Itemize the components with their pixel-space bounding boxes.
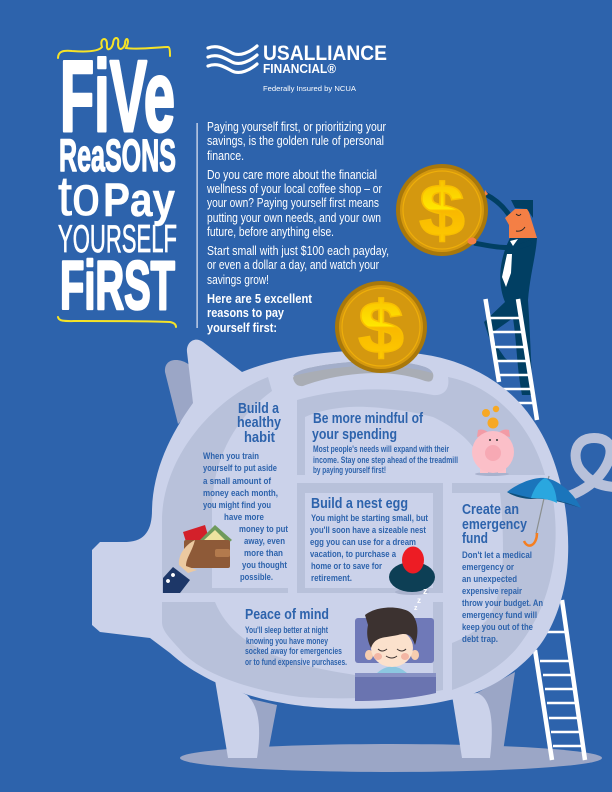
man in suit bbox=[474, 190, 537, 395]
piggy bank body bbox=[92, 340, 568, 709]
man smile and eye bbox=[516, 214, 525, 231]
text: Build a nest egg bbox=[310, 513, 429, 584]
cheeks bbox=[374, 653, 409, 660]
text: Create an emergency fund: Don't let a medical bbox=[462, 550, 532, 561]
icon: pink piggy bank bbox=[472, 406, 514, 476]
hair bbox=[365, 608, 417, 648]
text: Build a nest egg: home or to save for bbox=[311, 561, 382, 572]
text: Peace of mind: socked away for emergencies bbox=[245, 646, 342, 656]
heading: Be more mindful of your spending: Be more mindful of bbox=[313, 411, 423, 427]
icon: umbrella bbox=[507, 476, 581, 546]
heading: Be more mindful of your spending: your spending bbox=[312, 427, 397, 443]
compartment 4 frame bbox=[452, 483, 556, 690]
text: Be more mindful: by paying yourself first! bbox=[313, 465, 386, 475]
heading: Build a healthy habit: habit bbox=[244, 430, 275, 446]
text: Be more mindful: Most people's needs will expand with their bbox=[313, 444, 449, 454]
text: Create an emergency fund: an unexpected bbox=[462, 574, 517, 585]
title word: to: to bbox=[58, 164, 100, 227]
logo name: USALLIANCE bbox=[263, 41, 387, 65]
intro paragraph 3: or even a dollar a day, and watch your bbox=[207, 258, 379, 272]
intro bold lead-in: yourself first: bbox=[207, 321, 277, 335]
pig tail bbox=[566, 438, 612, 497]
ears bbox=[365, 650, 419, 660]
lower ladder bbox=[535, 600, 585, 760]
intro paragraph 1: savings, is the golden rule of personal bbox=[207, 134, 384, 148]
intro paragraph 3: Start small with just $100 each payday, bbox=[207, 244, 389, 258]
face bbox=[371, 629, 413, 667]
compartment 2 frame bbox=[297, 377, 545, 475]
text: Build a healthy habit: yourself to put aside bbox=[203, 463, 277, 474]
text: Create an emergency fund: throw your budget. An bbox=[462, 598, 543, 609]
piggy ears bbox=[477, 430, 510, 437]
text: Build a healthy habit: possible. bbox=[240, 572, 273, 583]
piggy shadow bbox=[475, 472, 509, 476]
title word: Yourself: YOURSELF bbox=[58, 218, 177, 261]
text: Build a healthy habit: have more bbox=[224, 512, 264, 523]
left leg bbox=[247, 698, 277, 758]
compartment 5 frame bbox=[162, 602, 443, 698]
text: Build a nest egg: You might be starting small, but bbox=[311, 513, 429, 524]
credit cards bbox=[183, 525, 210, 545]
heading: Peace of mind: Peace of mind bbox=[245, 607, 329, 623]
man upper arm bbox=[485, 194, 511, 218]
nest shadow bbox=[395, 589, 429, 595]
text: Build a healthy habit: you might find you bbox=[203, 500, 271, 511]
intro paragraph 3: savings grow! bbox=[207, 273, 269, 287]
blanket edge bbox=[355, 673, 436, 677]
sleep zzz marks: z bbox=[423, 586, 428, 596]
coin: on pig slot: $ bbox=[358, 286, 404, 369]
text: Build a nest egg: you'll soon have a sizeable nest bbox=[310, 525, 427, 536]
heading: Build a healthy habit: healthy bbox=[237, 415, 281, 431]
compartment 3 frame bbox=[297, 483, 443, 593]
heading: Build a nest egg: Build a nest egg bbox=[311, 496, 408, 512]
title: Five Reasons to Pay Yourself First bbox=[58, 38, 177, 327]
text: Create an emergency fund: emergency fund will bbox=[462, 610, 537, 621]
title word: Reasons: ReaSONS bbox=[59, 130, 176, 181]
heading: Create an emergency fund: Create an bbox=[462, 502, 519, 518]
sleeve bbox=[163, 567, 190, 593]
pig back ear bbox=[165, 360, 198, 424]
umbrella underside bbox=[507, 492, 581, 508]
heading: Build a healthy habit bbox=[237, 401, 281, 446]
piggy feet bbox=[480, 465, 506, 473]
text: Create an emergency fund: keep you out of the bbox=[462, 622, 533, 633]
umbrella center panel bbox=[531, 478, 557, 503]
logo: USAlliance Financial bbox=[208, 41, 387, 93]
text: Build a healthy habit: When you train bbox=[203, 451, 259, 462]
text: Build a healthy habit: away, even bbox=[244, 536, 285, 547]
man's hand on coin bbox=[468, 238, 476, 244]
intro paragraph 1 bbox=[207, 120, 386, 163]
man hands bbox=[484, 190, 488, 197]
icon: hand holding wallet bbox=[163, 525, 232, 593]
intro paragraph 1: Paying yourself first, or prioritizing your bbox=[207, 120, 386, 134]
closed eyes and mouth bbox=[378, 649, 406, 658]
wallet clasp bbox=[215, 549, 230, 557]
text: Create an emergency fund: emergency or bbox=[462, 562, 514, 573]
cuff buttons bbox=[166, 573, 175, 583]
coin: on pig slot bbox=[335, 281, 427, 373]
text: Create an emergency fund: expensive repair bbox=[462, 586, 522, 597]
cash bbox=[200, 525, 232, 545]
title word: Five: FiVe bbox=[60, 41, 175, 153]
intro paragraph 2: Do you care more about the financial bbox=[207, 168, 377, 182]
text: Build a healthy habit: a small amount of bbox=[203, 476, 272, 487]
intro bold lead-in: Here are 5 excellent bbox=[207, 292, 313, 306]
federally insured note: Federally Insured by NCUA bbox=[263, 84, 356, 93]
text: Build a healthy habit: money to put bbox=[239, 524, 289, 535]
text: Build a healthy habit bbox=[203, 451, 289, 583]
umbrella handle bbox=[524, 533, 537, 546]
pig interior compartments bbox=[162, 377, 556, 698]
man face bbox=[505, 209, 537, 238]
text: Peace of mind: You'll sleep better at night bbox=[245, 625, 328, 635]
intro paragraph 2: putting your own needs, and your own bbox=[207, 211, 381, 225]
icon: nest with red egg bbox=[389, 546, 435, 612]
logo subname: FINANCIAL® bbox=[263, 62, 337, 76]
umbrella shaft bbox=[536, 476, 549, 534]
sleep zzz marks bbox=[414, 586, 428, 612]
intro paragraph 1: finance. bbox=[207, 149, 244, 163]
heading: Create an emergency fund bbox=[462, 502, 527, 547]
umbrella canopy bbox=[507, 478, 581, 508]
right leg bbox=[477, 672, 515, 758]
compartment 1 frame bbox=[162, 377, 288, 593]
egg bbox=[402, 546, 424, 574]
wallet bbox=[184, 540, 230, 568]
text: Peace of mind: or to fund expensive purchases. bbox=[245, 657, 347, 667]
piggy body bbox=[472, 431, 514, 473]
text: Build a healthy habit: more than bbox=[244, 548, 283, 559]
text: Peace of mind: knowing you have money bbox=[246, 636, 328, 646]
intro paragraph 2: future, before anything else. bbox=[207, 225, 334, 239]
piggy snout bbox=[485, 445, 501, 461]
falling coins bbox=[482, 406, 499, 428]
intro vertical rule bbox=[196, 123, 198, 328]
intro paragraph 2: wellness of your local coffee shop – or bbox=[206, 182, 382, 196]
intro paragraph 2 bbox=[206, 168, 382, 239]
pajama shoulders bbox=[377, 666, 407, 673]
pillow bbox=[355, 618, 434, 663]
sleep zzz marks: z bbox=[414, 605, 418, 612]
intro paragraph 2: your own? Paying yourself first means bbox=[207, 196, 379, 210]
heading: Be more mindful of your spending bbox=[312, 411, 423, 443]
coin: held by man: $ bbox=[419, 169, 465, 252]
man collar and tie bbox=[502, 239, 518, 287]
pig legs bbox=[215, 672, 515, 758]
title word: Pay: Pay bbox=[103, 173, 175, 226]
text: Be more mindful: income. Stay one step ahead of the treadmill bbox=[313, 455, 458, 465]
man lower arm bbox=[474, 242, 531, 248]
text: Build a nest egg: vacation, to purchase a bbox=[310, 549, 397, 560]
man body and legs bbox=[484, 238, 537, 395]
hand bbox=[179, 540, 197, 573]
piggy eyes bbox=[489, 439, 498, 441]
heading: Build a healthy habit: Build a bbox=[238, 401, 280, 417]
coin slot bbox=[293, 361, 433, 386]
text: Be more mindful bbox=[313, 444, 458, 475]
title bottom flourish bbox=[58, 317, 176, 327]
nest bbox=[389, 562, 435, 592]
text: Create an emergency fund bbox=[462, 550, 543, 645]
intro bold lead-in: reasons to pay bbox=[207, 306, 284, 320]
icon: sleeping boy in bed bbox=[355, 608, 436, 701]
ground shadow ellipse bbox=[180, 744, 602, 772]
heading: Create an emergency fund: fund bbox=[462, 531, 488, 547]
intro text block bbox=[196, 120, 389, 335]
intro paragraph 3 bbox=[207, 244, 389, 287]
bed bbox=[355, 673, 436, 701]
text: Peace of mind bbox=[245, 625, 347, 667]
intro bold lead-in bbox=[207, 292, 313, 335]
sleep zzz marks: z bbox=[417, 596, 421, 605]
upper ladder bbox=[486, 299, 537, 420]
text: Build a nest egg: egg you can use for a dream bbox=[310, 537, 416, 548]
text: Build a healthy habit: you thought bbox=[242, 560, 288, 571]
text: Build a nest egg: retirement. bbox=[311, 573, 352, 584]
title word: First: FiRST bbox=[60, 247, 175, 324]
text: Build a healthy habit: money each month, bbox=[203, 488, 278, 499]
heading: Create an emergency fund: emergency bbox=[462, 517, 527, 533]
text: Create an emergency fund: debt trap. bbox=[462, 634, 498, 645]
title top flourish bbox=[58, 38, 170, 58]
logo waves bbox=[208, 46, 257, 72]
man hair bbox=[511, 200, 533, 218]
coin: held by man bbox=[396, 164, 488, 256]
